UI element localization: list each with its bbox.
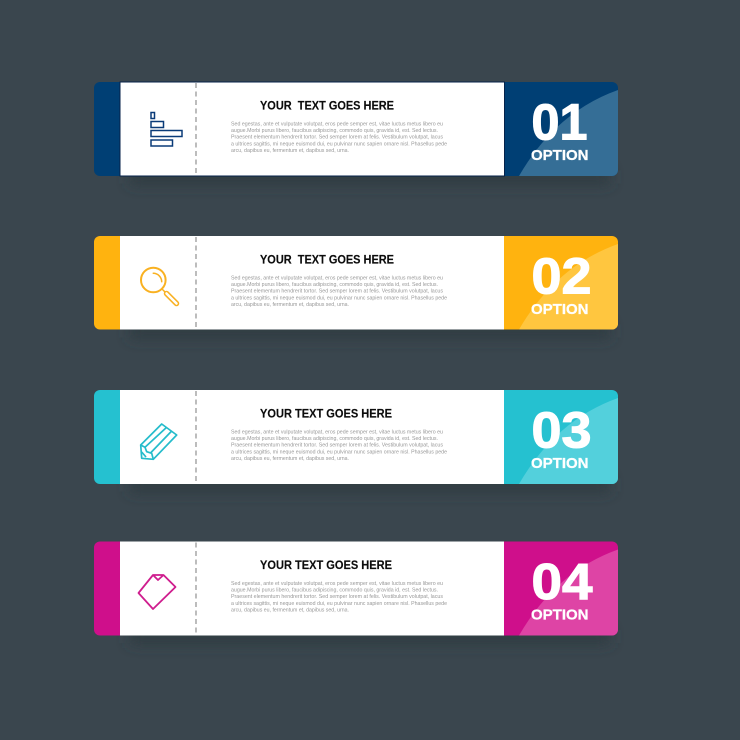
body text 03: augue.Morbi purus libero, faucibus adipiscing, commodo quis, gravida id, est. Sed lectus. [231, 436, 438, 442]
body text 03: Sed egestas, ante et vulputate volutpat, eros pede semper est, vitae luctus metus libero eu [231, 430, 443, 436]
body text 02: a ultrices sagittis, mi neque euismod dui, eu pulvinar nunc sapien ornare nisl. Phasellus pede [231, 296, 447, 302]
body text 03 [231, 430, 447, 462]
white content area 01 [120, 82, 504, 176]
white content area 03 [120, 390, 504, 484]
body text 01: a ultrices sagittis, mi neque euismod dui, eu pulvinar nunc sapien ornare nisl. Phasellus pede [231, 142, 447, 148]
number 03: 03 [532, 402, 592, 458]
icon: bar chart [151, 112, 182, 146]
heading 03: YOUR TEXT GOES HERE [260, 407, 392, 421]
number 04: 04 [532, 553, 593, 610]
left colour tab 03 [94, 390, 618, 484]
body text 01: augue.Morbi purus libero, faucibus adipiscing, commodo quis, gravida id, est. Sed lectus. [231, 128, 438, 134]
heading 01: YOUR TEXT GOES HERE [260, 99, 394, 113]
option label 04: OPTION [531, 606, 589, 624]
dashed divider 03 [195, 391, 197, 483]
white content area 02 [120, 236, 504, 330]
body text 04: Praesent elementum hendrerit tortor. Sed semper lorem at felis. Vestibulum volutpat, lacus [231, 594, 443, 600]
panel: option 03 [94, 390, 618, 492]
body text 02: Sed egestas, ante et vulputate volutpat, eros pede semper est, vitae luctus metus libero eu [231, 276, 443, 282]
option label 03: OPTION [531, 455, 589, 472]
body text 01: Sed egestas, ante et vulputate volutpat, eros pede semper est, vitae luctus metus libero eu [231, 122, 443, 128]
left colour tab 04 [94, 542, 618, 636]
number 01: 01 [532, 94, 588, 150]
dashed divider 02 [195, 237, 197, 329]
option label 01: OPTION [531, 147, 589, 164]
body text 04: arcu, dapibus eu, fermentum et, dapibus sed, urna. [231, 608, 349, 614]
body text 04 [231, 581, 447, 614]
body text 02: augue.Morbi purus libero, faucibus adipiscing, commodo quis, gravida id, est. Sed lectus. [231, 282, 438, 288]
option label 02: OPTION [531, 301, 589, 318]
body text 04: Sed egestas, ante et vulputate volutpat, eros pede semper est, vitae luctus metus libero eu [231, 581, 443, 587]
number 02: 02 [532, 248, 592, 304]
panel: option 04 [94, 542, 618, 644]
icon: magnifier [141, 268, 176, 304]
body text 02: Praesent elementum hendrerit tortor. Sed semper lorem at felis. Vestibulum volutpat, lacus [231, 288, 443, 294]
body text 02: arcu, dapibus eu, fermentum et, dapibus sed, urna. [231, 302, 349, 308]
body text 01: Praesent elementum hendrerit tortor. Sed semper lorem at felis. Vestibulum volutpat, lacus [231, 134, 443, 140]
icon: tag [138, 575, 176, 609]
dashed divider 04 [195, 542, 197, 634]
number panel highlight 02 [519, 244, 618, 330]
panel: option 01 [94, 82, 618, 184]
body text 01: arcu, dapibus eu, fermentum et, dapibus sed, urna. [231, 148, 349, 154]
body text 03: arcu, dapibus eu, fermentum et, dapibus sed, urna. [231, 456, 349, 462]
panel: option 02 [94, 236, 618, 338]
dashed divider 01 [195, 83, 197, 175]
body text 04: a ultrices sagittis, mi neque euismod dui, eu pulvinar nunc sapien ornare nisl. Phasellus pede [231, 601, 447, 607]
heading 02: YOUR TEXT GOES HERE [260, 253, 394, 267]
white content area 04 [120, 542, 504, 636]
number panel highlight 04 [519, 550, 618, 636]
body text 01 [231, 122, 447, 154]
number panel highlight 01 [519, 90, 618, 176]
number panel highlight 03 [519, 398, 618, 484]
heading 04: YOUR TEXT GOES HERE [260, 558, 392, 572]
left colour tab 01 [94, 82, 618, 176]
body text 03: a ultrices sagittis, mi neque euismod dui, eu pulvinar nunc sapien ornare nisl. Phasellus pede [231, 450, 447, 456]
body text 03: Praesent elementum hendrerit tortor. Sed semper lorem at felis. Vestibulum volutpat, lacus [231, 442, 443, 448]
left colour tab 02 [94, 236, 618, 330]
body text 04: augue.Morbi purus libero, faucibus adipiscing, commodo quis, gravida id, est. Sed lectus. [231, 588, 438, 594]
body text 02 [231, 276, 447, 308]
icon: pencil [141, 424, 177, 459]
